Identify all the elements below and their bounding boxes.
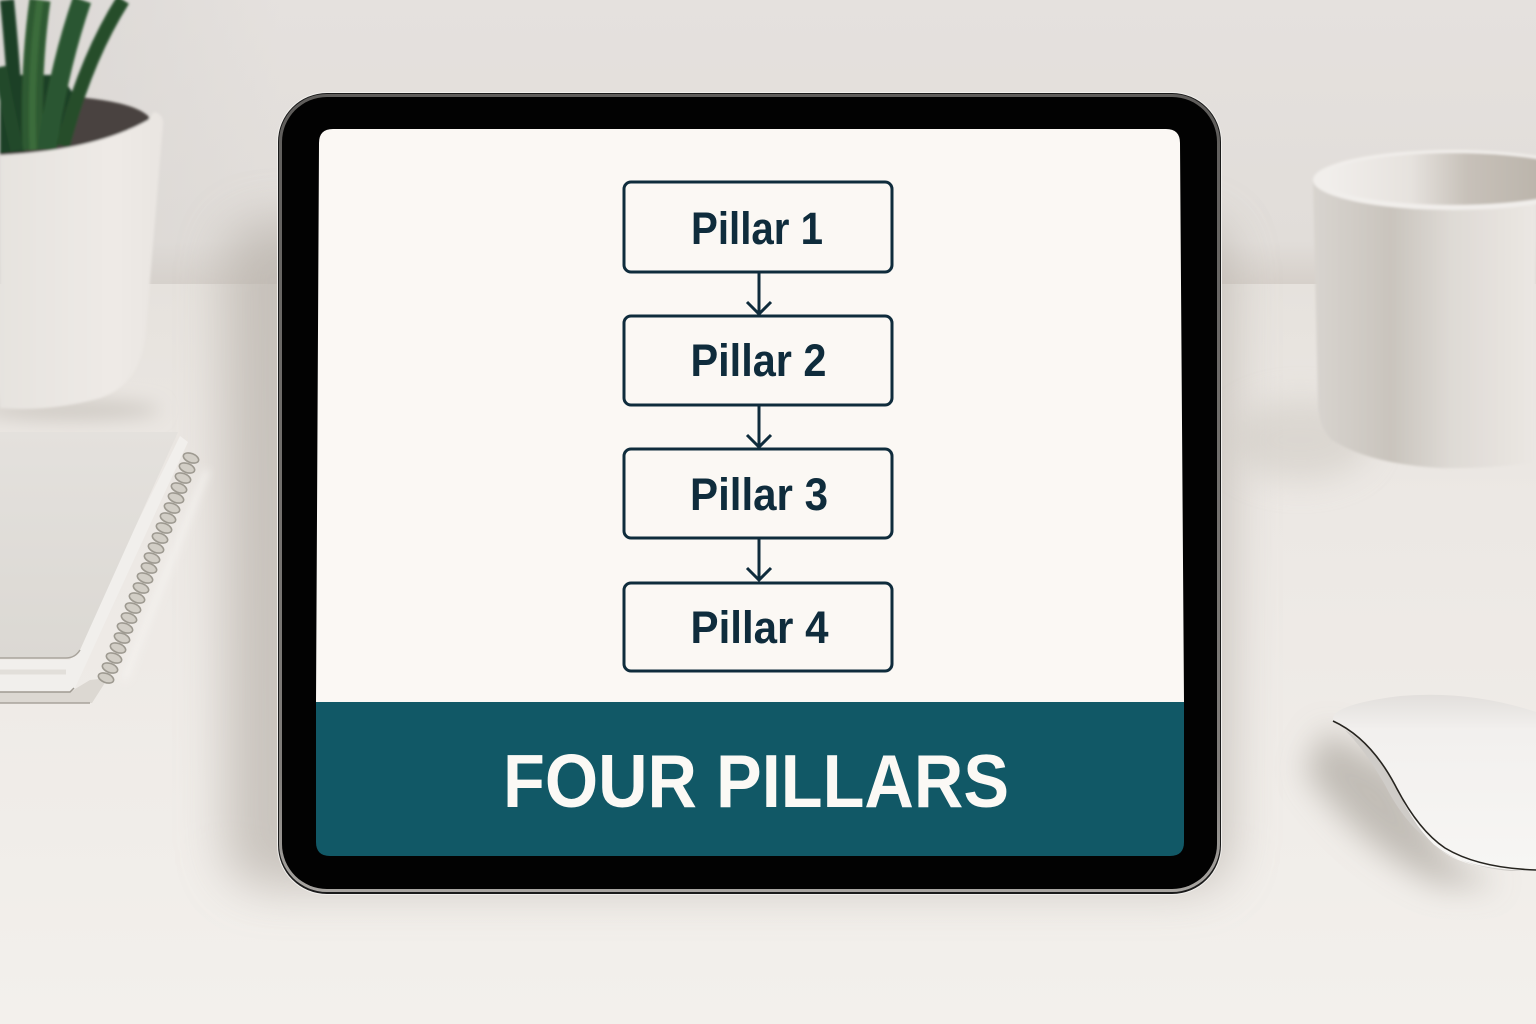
icon: potted plant <box>0 0 163 420</box>
tablet device <box>277 92 1222 895</box>
mouse edge <box>1333 721 1536 870</box>
tablet bezel <box>282 97 1217 889</box>
arrow 2 to 3 <box>747 405 771 447</box>
mouse body <box>1333 695 1536 871</box>
icon: spiral notebook <box>0 432 207 703</box>
spiral halo <box>124 470 207 680</box>
pillar 1 box <box>624 182 892 272</box>
pillar 3 box: Pillar 3 <box>690 469 828 520</box>
icon: computer mouse <box>1305 695 1536 885</box>
icon: coffee mug <box>1230 150 1536 480</box>
flowchart <box>624 182 892 671</box>
wall shading <box>0 0 280 284</box>
mouse shadow <box>1305 730 1500 885</box>
title banner <box>316 702 1184 856</box>
arrow 3 to 4 <box>747 538 771 580</box>
pillar 2 box: Pillar 2 <box>690 335 826 386</box>
desk surface <box>0 284 1536 1024</box>
notebook cover <box>0 432 178 658</box>
pillar 2 box <box>624 316 892 405</box>
pillar 4 box <box>624 583 892 671</box>
pillar 1 box: Pillar 1 <box>691 203 823 254</box>
pillar 3 box <box>624 449 892 538</box>
notebook back cover <box>0 678 108 703</box>
title: FOUR PILLARS <box>503 739 1009 823</box>
notebook page edge <box>0 436 188 692</box>
tablet shadow <box>225 220 1230 888</box>
tablet frame <box>277 92 1222 895</box>
wall background <box>0 0 1536 284</box>
pillar 4 box: Pillar 4 <box>690 602 828 653</box>
mouse underside <box>1345 730 1536 871</box>
arrow 1 to 2 <box>747 272 771 314</box>
tablet screen <box>316 129 1184 702</box>
spiral binding <box>97 451 200 685</box>
